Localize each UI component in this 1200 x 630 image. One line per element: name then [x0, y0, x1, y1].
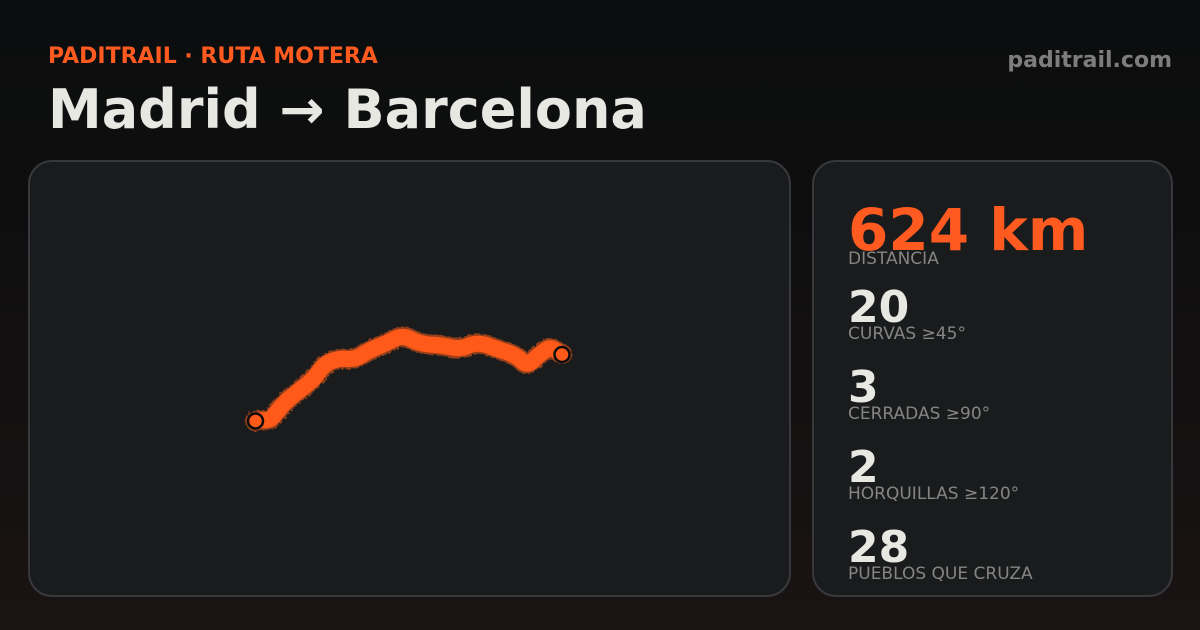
eyebrow: brand and route type: PADITRAIL · RUTA MOTERA — [48, 44, 378, 69]
label: curves: CURVAS ≥45° — [848, 324, 966, 344]
stat: distance: 624 km — [848, 196, 1088, 264]
label: distance: DISTANCIA — [848, 249, 939, 269]
label: sharp turns: CERRADAS ≥90° — [848, 404, 990, 424]
stat: towns: 28 — [848, 522, 909, 573]
panel: route map — [28, 160, 791, 597]
stat: curves: 20 — [848, 282, 909, 333]
panel: route statistics — [812, 160, 1173, 597]
label: hairpins: HORQUILLAS ≥120° — [848, 484, 1019, 504]
title: Madrid → Barcelona — [48, 78, 647, 141]
stat: sharp turns: 3 — [848, 362, 879, 413]
label: towns: PUEBLOS QUE CRUZA — [848, 564, 1033, 584]
stat: hairpins: 2 — [848, 442, 879, 493]
website label: paditrail.com — [1007, 48, 1172, 73]
